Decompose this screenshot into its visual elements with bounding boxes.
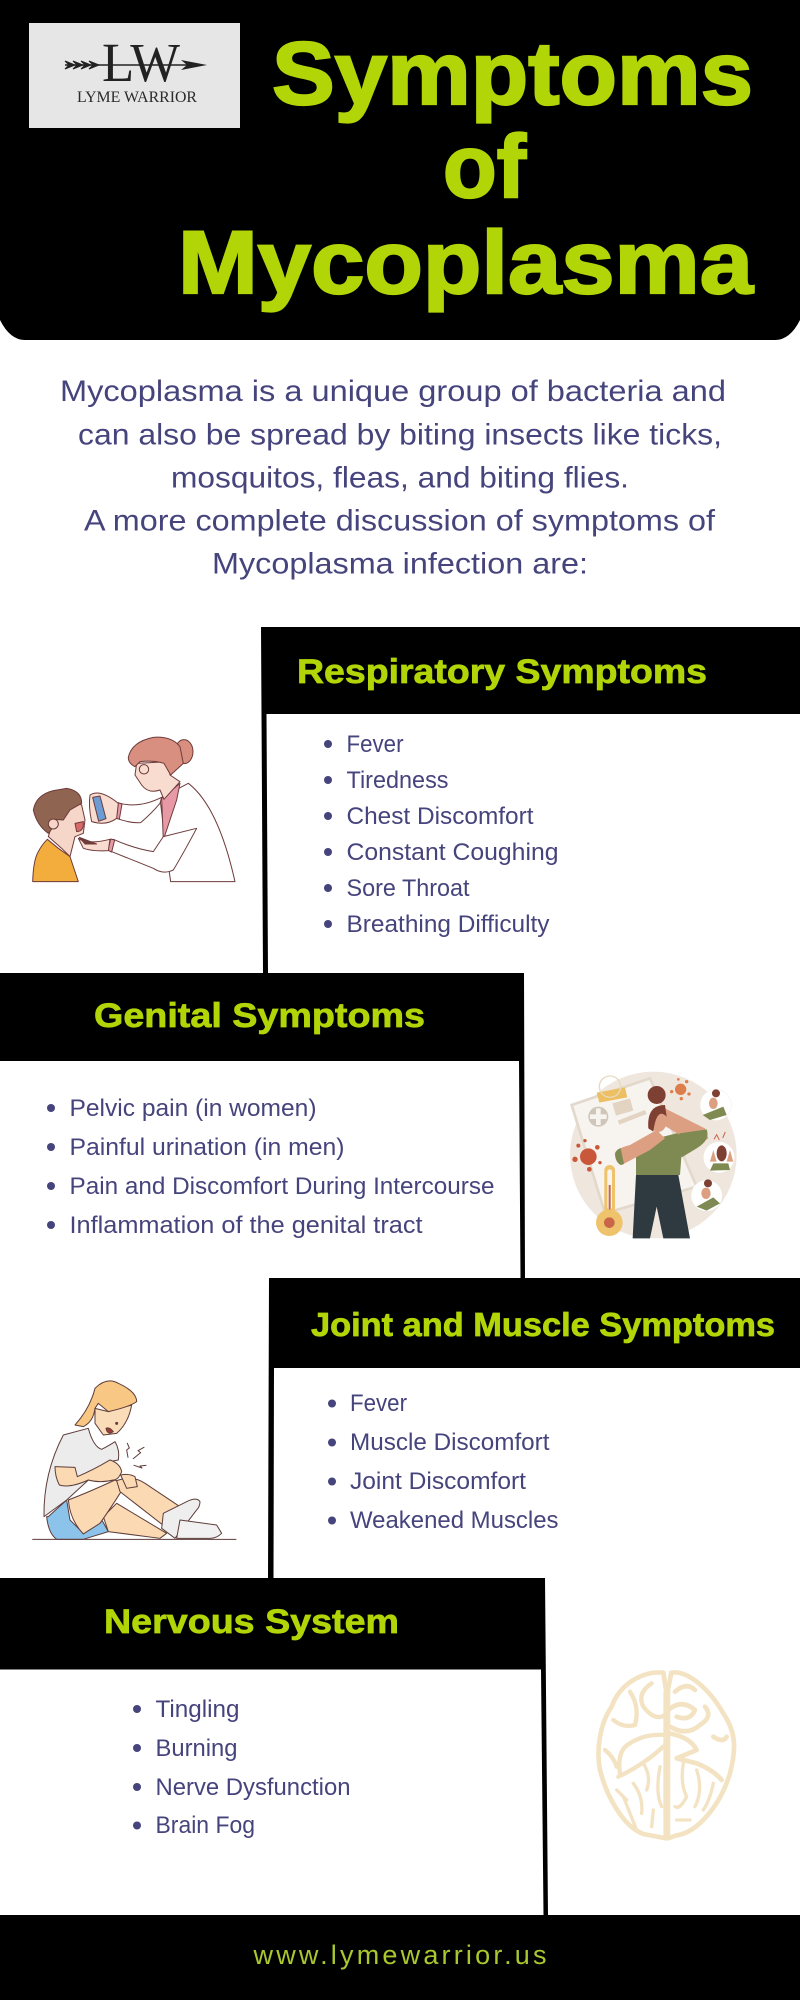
title: Symptoms (272, 23, 753, 123)
list: genital: Inflammation of the genital tract (70, 1212, 423, 1239)
logo: Lyme Warrior: LW (102, 32, 180, 93)
list: genital: Pain and Discomfort During Intercourse (70, 1173, 495, 1200)
icon: woman with symptoms (570, 1072, 737, 1238)
panel: genital symptoms (0, 973, 525, 1278)
intro paragraph: mosquitos, fleas, and biting flies. (171, 462, 629, 494)
list: respiratory: Tiredness (346, 767, 448, 794)
list: genital (47, 1095, 495, 1239)
intro paragraph: Mycoplasma is a unique group of bacteria and (60, 375, 726, 408)
list: nervous system: Tingling (156, 1696, 240, 1723)
website url: www.lymewarrior.us (252, 1940, 546, 1970)
panel: joint and muscle symptoms (268, 1278, 800, 1578)
title: Mycoplasma (178, 212, 755, 312)
list: nervous system: Burning (156, 1735, 238, 1762)
list: nervous system: Brain Fog (156, 1812, 255, 1839)
intro paragraph: Mycoplasma infection are: (212, 548, 588, 580)
list: respiratory: Sore Throat (346, 875, 470, 902)
list: joint and muscle: Weakened Muscles (350, 1507, 558, 1534)
panel: nervous system (0, 1578, 548, 1915)
intro paragraph: A more complete discussion of symptoms of (84, 504, 716, 538)
list: nervous system: Nerve Dysfunction (156, 1774, 350, 1801)
panel: respiratory symptoms (261, 627, 800, 973)
list: genital: Painful urination (in men) (70, 1134, 344, 1161)
logo: Lyme Warrior (29, 23, 240, 128)
list: respiratory: Breathing Difficulty (346, 911, 550, 938)
heading: genital: Genital Symptoms (94, 997, 425, 1035)
title (178, 23, 755, 312)
header banner (0, 0, 800, 340)
list: genital: Pelvic pain (in women) (70, 1095, 316, 1122)
list: joint and muscle: Fever (350, 1390, 407, 1417)
list: joint and muscle: Joint Discomfort (350, 1468, 526, 1495)
logo: Lyme Warrior: LYME WARRIOR (77, 89, 197, 106)
title: of (443, 116, 526, 216)
list: joint and muscle: Muscle Discomfort (350, 1429, 550, 1456)
footer (0, 1915, 800, 2000)
icon: woman holding sore knee (33, 1381, 236, 1539)
list: respiratory: Fever (346, 731, 404, 758)
list: nervous system (133, 1696, 350, 1839)
icon: doctor giving child an inhaler (33, 737, 235, 882)
intro paragraph (60, 375, 726, 580)
icon: brain (598, 1672, 734, 1838)
list: joint and muscle (328, 1390, 558, 1534)
list: respiratory: Constant Coughing (346, 839, 558, 866)
list: respiratory: Chest Discomfort (346, 803, 534, 830)
heading: respiratory: Respiratory Symptoms (297, 653, 707, 691)
intro paragraph: can also be spread by biting insects like ticks, (78, 418, 722, 452)
heading: joint and muscle: Joint and Muscle Symptoms (311, 1306, 775, 1343)
list: respiratory (324, 731, 558, 938)
heading: nervous system: Nervous System (104, 1603, 399, 1641)
